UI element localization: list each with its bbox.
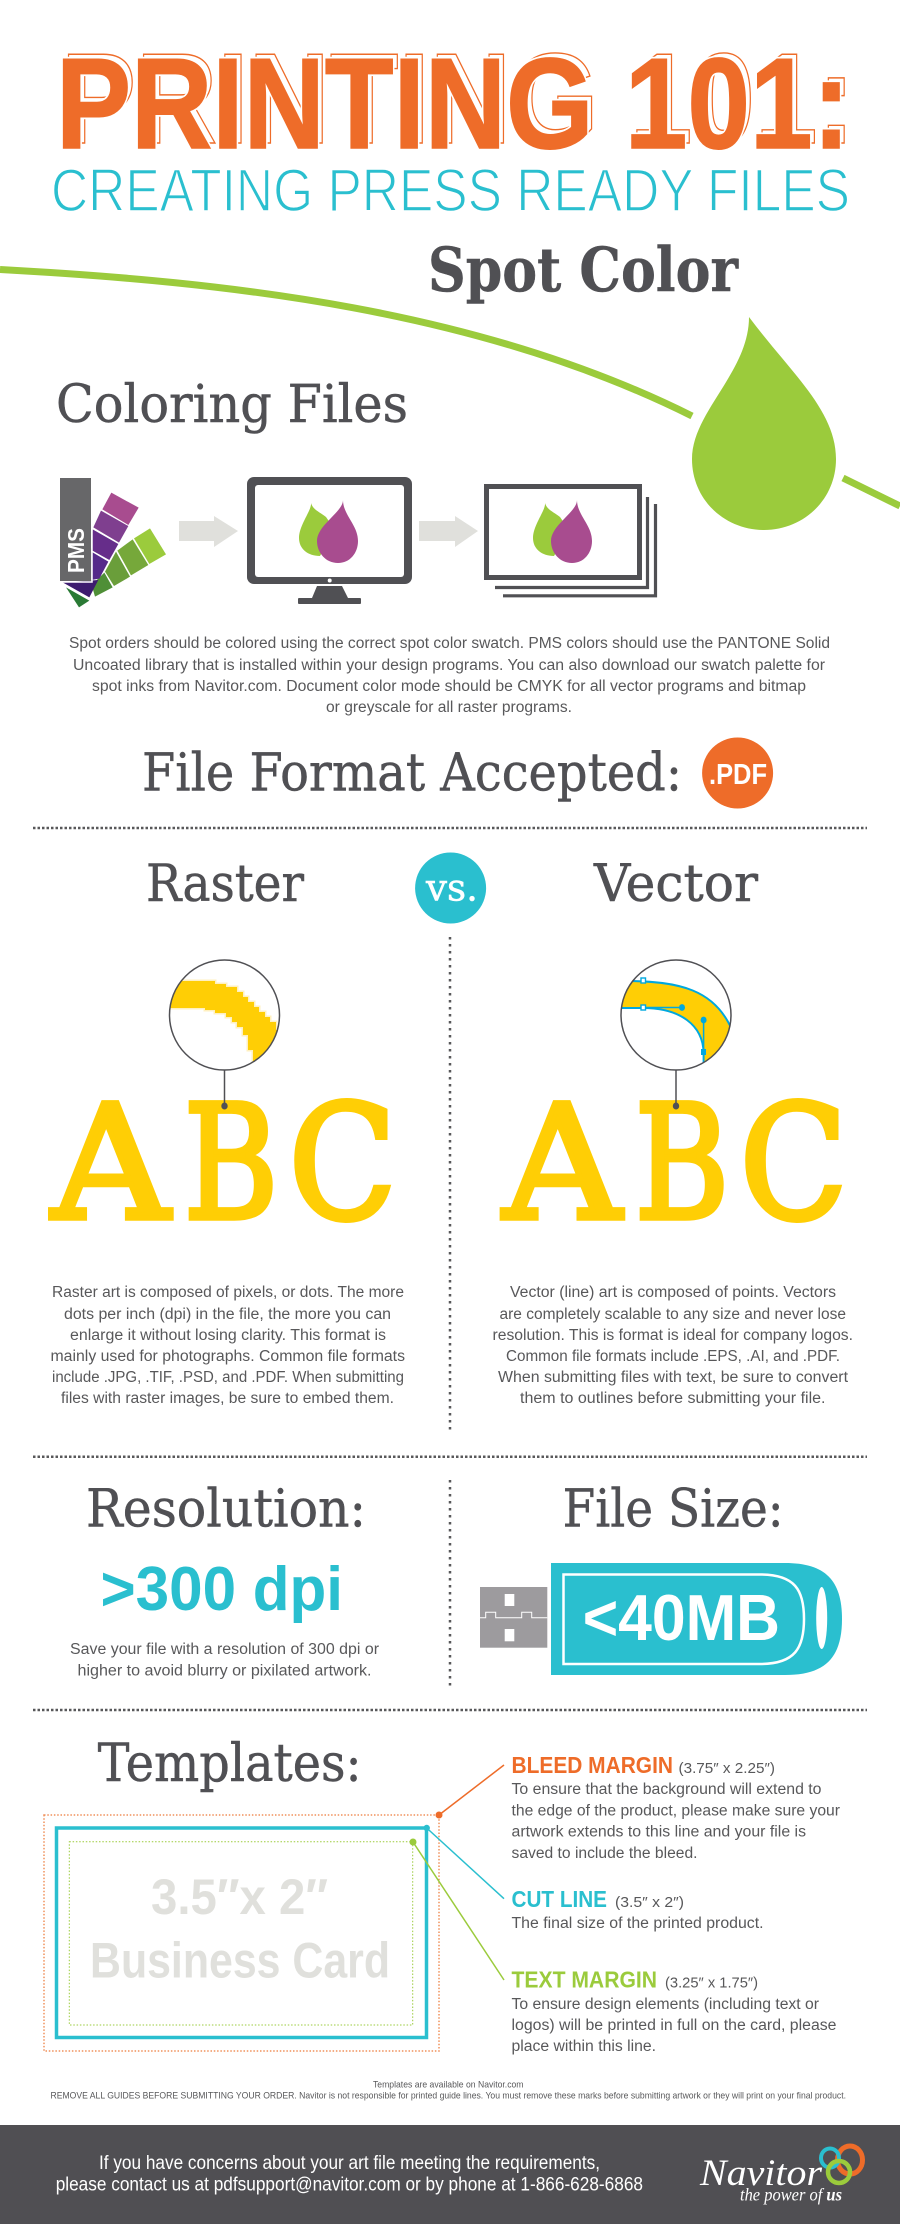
heading: Spot Color: Spot Color — [428, 235, 739, 306]
heading: File Format Accepted: File Format Accepted: — [142, 744, 682, 804]
text: spot color instructions: spot inks from Navitor.com. Document color mode should be CMYK for all vector programs and bitmap — [92, 678, 806, 695]
callout: bleed margin: To ensure that the background will extend to — [512, 1781, 822, 1798]
text: raster description: mainly used for photographs. Common file formats — [50, 1348, 405, 1365]
badge: PDF: .PDF — [709, 759, 767, 791]
heading: Templates: Templates: — [98, 1734, 362, 1794]
text: footer contact: If you have concerns about your art file meeting the requirements, — [99, 2152, 600, 2174]
text: vector description: When submitting files with text, be sure to convert — [498, 1369, 849, 1386]
text: raster description: dots per inch (dpi) in the file, the more you can — [64, 1306, 391, 1323]
text: resolution description — [70, 1641, 379, 1680]
text: footer contact — [56, 2152, 643, 2196]
callout: bleed margin: (3.75″ x 2.25″) — [678, 1760, 775, 1777]
callout: text margin — [512, 1967, 836, 2055]
heading: Resolution: Resolution: — [86, 1480, 366, 1540]
text: vector description: resolution. This is format is ideal for company logos. — [492, 1327, 853, 1344]
vector ABC letters: A — [502, 1072, 623, 1256]
logo: Navitor the power of us: Navitor — [699, 2153, 823, 2194]
magnifier: vector bezier curve — [615, 960, 732, 1110]
vector ABC letters: C — [740, 1072, 847, 1256]
text: spot color instructions: Uncoated library that is installed within your design programs. You can also download our swatch palette for — [73, 657, 825, 674]
text: vector description: them to outlines before submitting your file. — [520, 1390, 826, 1407]
arrow: swatch to monitor — [179, 516, 238, 547]
callout: text margin: (3.25″ x 1.75″) — [665, 1975, 758, 1992]
text: resolution description: Save your file with a resolution of 300 dpi or — [70, 1641, 379, 1658]
heading: Vector: Vector — [593, 855, 759, 914]
badge: PDF — [702, 738, 773, 808]
text: templates note and disclaimer: Templates are available on Navitor.com — [373, 2080, 524, 2091]
icon: monitor with ink drops — [247, 477, 412, 604]
diagram: business card template guides: 3.5″x 2″ — [151, 1869, 328, 1925]
icon: USB drive with 40MB limit — [480, 1563, 842, 1675]
logo: Navitor the power of us — [699, 2146, 862, 2205]
text: spot color instructions — [69, 635, 830, 716]
raster ABC letters: B — [184, 1072, 278, 1256]
text: vector description: are completely scalable to any size and never lose — [500, 1306, 846, 1323]
badge: vs. — [415, 852, 486, 924]
icon: PMS swatch fan: PMS — [63, 528, 89, 573]
text: vector description — [492, 1284, 853, 1407]
text: spot color instructions: or greyscale for all raster programs. — [326, 699, 572, 716]
raster ABC letters: A — [51, 1072, 171, 1256]
text: vector description: Vector (line) art is composed of points. Vectors — [510, 1284, 836, 1301]
heading: Raster: Raster — [146, 855, 305, 914]
text: resolution description: higher to avoid blurry or pixilated artwork. — [78, 1662, 372, 1680]
icon: stacked printed sheets with ink drops — [486, 486, 656, 596]
text: spot color instructions: Spot orders should be colored using the correct spot color swatch. PMS colors should use the PANTONE Solid — [69, 635, 830, 652]
callout: bleed margin: artwork extends to this line and your file is — [512, 1824, 806, 1841]
diagram: business card template guides: Business Card — [90, 1933, 390, 1989]
badge: vs.: vs. — [425, 866, 478, 910]
icon: PMS swatch fan — [60, 478, 166, 607]
icon: USB drive with 40MB limit: <40MB — [583, 1581, 780, 1654]
callout: cut line: The final size of the printed product. — [512, 1915, 764, 1932]
vector ABC letters: B — [635, 1072, 729, 1256]
text: raster description: enlarge it without losing clarity. This format is — [70, 1327, 386, 1344]
callout: text margin: TEXT MARGIN — [512, 1967, 657, 1993]
raster ABC letters: C — [289, 1072, 396, 1256]
green swoosh line with spot color drop — [0, 270, 900, 530]
callout: text margin: place within this line. — [512, 2038, 656, 2055]
logo: Navitor the power of us: the power of us — [740, 2185, 842, 2205]
arrow: monitor to print — [419, 516, 478, 547]
heading: Coloring Files: Coloring Files — [56, 375, 408, 435]
footer band — [0, 2125, 900, 2224]
text: templates note and disclaimer — [50, 2080, 846, 2102]
callout: bleed margin: BLEED MARGIN — [512, 1752, 673, 1778]
callout: text margin: logos) will be printed in full on the card, please — [512, 2017, 836, 2034]
text: vector description: Common file formats include .EPS, .AI, and .PDF. — [506, 1348, 840, 1365]
vector ABC letters — [502, 1072, 847, 1256]
stat: greater than 300 dpi: >300 dpi — [100, 1555, 343, 1624]
raster ABC letters — [51, 1072, 396, 1256]
text: raster description: include .JPG, .TIF, .PSD, and .PDF. When submitting — [52, 1369, 404, 1386]
text: raster description: Raster art is composed of pixels, or dots. The more — [52, 1284, 404, 1301]
callout: bleed margin — [512, 1752, 840, 1862]
callout: text margin: To ensure design elements (including text or — [512, 1996, 819, 2013]
callout: bleed margin: saved to include the bleed. — [512, 1845, 698, 1862]
heading: File Size: File Size: — [563, 1480, 784, 1540]
callout: cut line: CUT LINE — [512, 1886, 607, 1912]
diagram: business card template guides — [44, 1765, 504, 2051]
callout: cut line — [512, 1886, 764, 1932]
magnifier: raster pixel edge — [165, 960, 282, 1110]
text: raster description: files with raster images, be sure to embed them. — [61, 1390, 394, 1407]
callout: bleed margin: the edge of the product, please make sure your — [512, 1803, 840, 1820]
callout: cut line: (3.5″ x 2″) — [615, 1894, 684, 1911]
text: raster description — [50, 1284, 405, 1407]
text: footer contact: please contact us at pdfsupport@navitor.com or by phone at 1-866-628-6868 — [56, 2174, 643, 2196]
